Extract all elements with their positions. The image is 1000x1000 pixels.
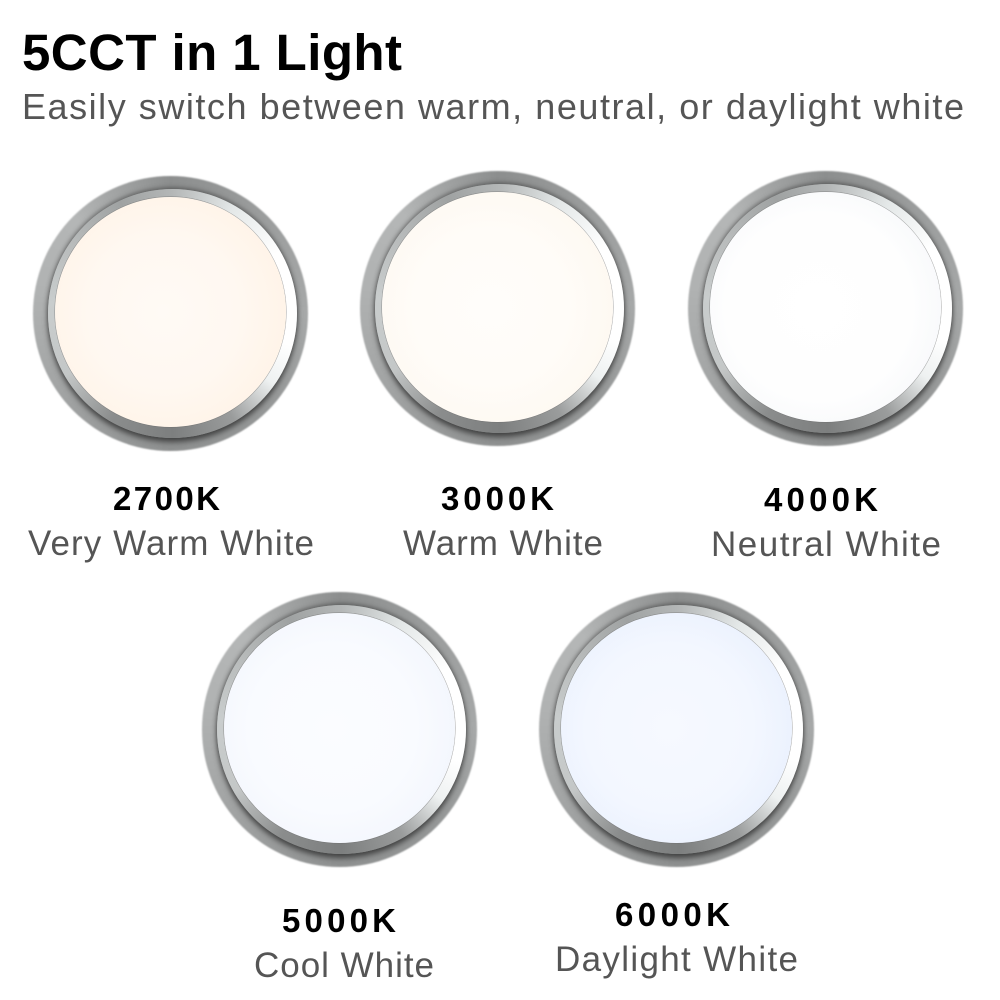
- label: 5000K text: [254, 902, 434, 985]
- label: 4000K text: 4000K: [764, 481, 878, 518]
- label: 4000K text: [711, 481, 941, 564]
- lamp: 2700K: [32, 175, 309, 452]
- panel: 4000K neutral white: [687, 170, 964, 564]
- label: 3000K text: 3000K: [441, 480, 554, 517]
- title: 5CCT in 1 Light: [22, 24, 402, 81]
- label: 2700K text: 2700K: [113, 480, 220, 517]
- label: 2700K text: [28, 480, 314, 563]
- lamp: 3000K: [359, 170, 636, 447]
- label: 5000K text: 5000K: [282, 902, 396, 939]
- label: 6000K text: 6000K: [615, 896, 730, 933]
- label: 3000K text: [403, 480, 603, 563]
- lamp: 6000K: [538, 591, 815, 868]
- subtitle: Easily switch between warm, neutral, or daylight white: [22, 86, 964, 127]
- label: 6000K text: [555, 896, 798, 979]
- lamp: 4000K: [687, 170, 964, 447]
- panel: 6000K daylight white: [538, 591, 815, 979]
- panel: 5000K cool white: [201, 591, 478, 985]
- label: 6000K text: Daylight White: [555, 940, 798, 979]
- label: 5000K text: Cool White: [254, 946, 434, 985]
- label: 4000K text: Neutral White: [711, 525, 941, 564]
- panel: 2700K very warm white: [28, 175, 314, 563]
- label: 3000K text: Warm White: [403, 524, 603, 563]
- lamp: 5000K: [201, 591, 478, 868]
- label: 2700K text: Very Warm White: [28, 524, 314, 563]
- panel: 3000K warm white: [359, 170, 636, 563]
